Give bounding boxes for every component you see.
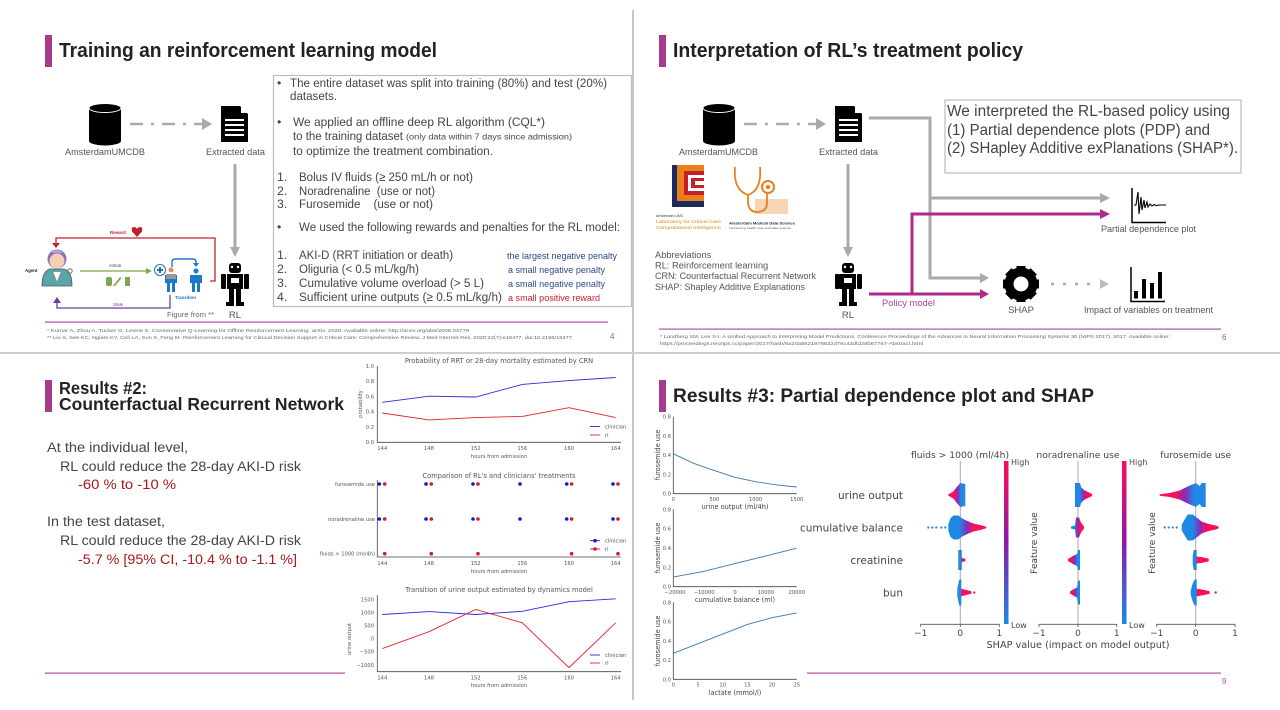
title accent bar	[45, 380, 52, 412]
divider line	[45, 322, 608, 323]
arrow: action	[80, 268, 152, 274]
text box: interpretation methods: (1) Partial dependence plots (PDP) and	[947, 122, 1210, 139]
line chart: probability of RRT or mortality: probability	[358, 390, 364, 418]
footnotes: * Kumar A, Zhou A, Tucker G, Levine S. Conservative Q-Learning for Offline Reinforcement Learning. arXiv. 2020. Available online: http://arxiv.org/abs/2006.04779	[47, 328, 469, 334]
line chart: urine output transition: 1000	[361, 611, 374, 617]
axis label: feature value furosemide: Feature value	[1148, 512, 1158, 574]
line chart: probability of RRT or mortality: clinician	[605, 424, 626, 430]
icon: treatments	[106, 277, 130, 286]
logo: amsterdam medical data science: Amsterdam Medical Data Science	[729, 220, 796, 226]
icon: partial dependence plot	[1132, 188, 1166, 222]
arrows: gray data flow	[869, 118, 1110, 283]
icon: document	[835, 106, 862, 142]
label: state: State	[113, 302, 124, 307]
line chart: urine output transition: −500	[360, 650, 374, 656]
text block: test dataset: In the test dataset,	[47, 514, 165, 529]
page number: 4	[610, 332, 615, 341]
text box: model training details: 3.	[277, 276, 287, 290]
label: extracted data: Extracted data	[819, 147, 879, 158]
title accent bar	[45, 35, 52, 67]
dot chart: RL vs clinician treatments: furosemide use	[335, 482, 375, 488]
colorbar: noradrenaline: Low	[1129, 621, 1145, 630]
arrow: state	[53, 295, 170, 308]
dot chart: RL vs clinician treatments: fluids > 1000 (ml/4h)	[320, 552, 375, 558]
heading: interpretation: Interpretation of RL’s treatment policy	[673, 40, 1024, 62]
line chart: urine output transition: 164	[611, 676, 621, 682]
SHAP plot: fluids	[911, 450, 1009, 639]
text box: model training details: •	[277, 115, 281, 129]
text box: model training details: 3.	[277, 197, 287, 211]
text box: model training details: to optimize the treatment combination.	[293, 144, 493, 158]
text box: model training details: a small negative penalty	[508, 265, 605, 275]
abbreviations text: CRN: Counterfactual Recurrent Network	[655, 271, 816, 281]
SHAP plot: furosemide: 0	[1193, 629, 1199, 639]
line chart: probability of RRT or mortality: rl	[605, 433, 609, 439]
text block: test dataset: -5.7 % [95% CI, -10.4 % to -1.1 %]	[78, 552, 297, 567]
arrow: data to RL	[230, 164, 240, 257]
text block: individual level: At the individual level,	[47, 440, 188, 455]
SHAP plot: fluids: 1	[996, 629, 1002, 639]
line chart: urine output transition: 152	[471, 676, 481, 682]
text box: model training details: The entire dataset was split into training (80%) and test (20%)	[290, 76, 607, 90]
label: extracted data: Extracted data	[206, 147, 266, 158]
line chart: PDP lactate: 25	[793, 682, 800, 688]
logo: laboratory for critical care: Laboratory for Critical Care	[656, 219, 722, 224]
line chart: PDP cumulative balance: −20000	[665, 590, 685, 596]
label: impact of variables: Impact of variables on treatment	[1084, 305, 1213, 316]
line chart: PDP urine output: 0.8	[663, 415, 671, 421]
text box: model training details: •	[277, 76, 281, 90]
SHAP plot: noradrenaline: 0	[1075, 629, 1081, 639]
SHAP plot: furosemide: furosemide use	[1160, 450, 1231, 461]
line chart: PDP cumulative balance: 0	[733, 590, 737, 596]
line chart: PDP urine output: 1500	[790, 497, 803, 503]
text box: interpretation methods: We interpreted the RL-based policy using	[947, 103, 1230, 120]
text box: model training details: 2.	[277, 184, 287, 198]
footnotes	[47, 328, 572, 341]
line chart: PDP lactate: 5	[696, 682, 700, 688]
heading: results 2	[59, 378, 344, 414]
line chart: probability of RRT or mortality: 144	[377, 446, 388, 452]
footnotes: https://proceedings.neurips.cc/paper/2017/hash/8a20a8621978632d76c43dfd28b67767-Abstract.html	[660, 341, 923, 347]
line chart: PDP cumulative balance: 0.0	[663, 585, 671, 591]
line chart: PDP cumulative balance: 0.4	[663, 546, 672, 552]
line chart: PDP urine output	[654, 415, 803, 511]
icon: bar chart	[1131, 267, 1165, 302]
line chart: urine output transition: urine output	[347, 623, 353, 655]
line chart: PDP cumulative balance: cumulative balance (ml)	[695, 596, 775, 604]
line chart: PDP urine output: 500	[709, 497, 719, 503]
text box: model training details: the largest negative penalty	[507, 251, 617, 261]
dot chart: RL vs clinician treatments: 164	[611, 561, 621, 567]
panel: results 2 counterfactual recurrent network	[45, 357, 626, 689]
line chart: urine output transition: 148	[424, 676, 434, 682]
line chart: urine output transition: hours from admission	[471, 683, 527, 689]
colorbar: fluids	[1004, 458, 1029, 630]
divider line	[659, 328, 1221, 330]
line chart: probability of RRT or mortality: 0.2	[366, 425, 374, 431]
line chart: PDP lactate: 0.4	[663, 639, 672, 645]
line chart: PDP lactate: lactate (mmol/l)	[709, 689, 761, 697]
line chart: PDP cumulative balance: 0.2	[663, 566, 671, 572]
line chart: PDP urine output: 0.0	[663, 492, 671, 498]
abbreviations text	[655, 250, 816, 292]
dot chart: RL vs clinician treatments: rl	[605, 547, 609, 553]
line chart: urine output transition: 500	[364, 624, 374, 630]
icon: plus circle	[154, 264, 166, 276]
dot chart: RL vs clinician treatments: 144	[377, 561, 388, 567]
dot chart: RL vs clinician treatments: hours from admission	[471, 569, 527, 575]
arrow: dash-dot to extracted data	[130, 118, 212, 130]
icon: heart	[132, 227, 142, 237]
label: AmsterdamUMCDB: AmsterdamUMCDB	[679, 147, 758, 158]
logo: laboratory for critical care: Computational Intelligence	[656, 225, 722, 230]
line chart: probability of RRT or mortality	[358, 357, 626, 460]
dot chart: RL vs clinician treatments: 152	[471, 561, 481, 567]
heading: results 2: Results #2:	[59, 378, 147, 398]
icon: database	[89, 104, 121, 146]
line chart: probability of RRT or mortality: 160	[564, 446, 574, 452]
label: transition: Transition	[175, 295, 196, 300]
text box: model training details: 1.	[277, 170, 287, 184]
line chart: PDP urine output: 0.6	[663, 434, 671, 440]
label: action: Action	[109, 263, 122, 268]
line chart: PDP lactate: 0.6	[663, 620, 671, 626]
line chart: urine output transition: 0	[371, 637, 374, 643]
title accent bar	[659, 35, 666, 67]
text block: test dataset: RL could reduce the 28-day AKI-D risk	[60, 533, 301, 548]
footnotes	[660, 334, 1170, 347]
line chart: PDP cumulative balance: 0.6	[663, 526, 671, 532]
arrow: transition	[172, 259, 199, 267]
line chart: PDP lactate: 20	[769, 682, 775, 688]
label: SHAP: SHAP	[1008, 305, 1034, 316]
text box: model training details: datasets.	[290, 89, 337, 103]
line chart: probability of RRT or mortality: 0.8	[366, 379, 374, 385]
divider line	[45, 672, 345, 674]
label: agent: Agent	[25, 268, 38, 273]
title accent bar	[659, 380, 666, 412]
text box: model training details: a small negative penalty	[508, 279, 605, 289]
footnotes: ** Liu S, See KC, Ngiam KY, Celi LA, Sun X, Feng M. Reinforcement Learning for Clinical Decision Support in Critical Care: Comprehensive Review. J Med Internet Res. 2020;22(7):e18477. doi:10.2196/18477	[47, 335, 572, 341]
line chart: PDP cumulative balance: −10000	[694, 590, 715, 596]
text block: test dataset	[47, 514, 301, 567]
text box: model training details: (only data within 7 days since admission)	[406, 132, 572, 142]
panel: results 3 PDP and SHAP	[654, 380, 1238, 697]
SHAP plot: furosemide: −1	[1150, 629, 1163, 639]
line chart: urine output transition: 1500	[361, 598, 374, 604]
page number: 6	[1222, 333, 1227, 342]
label: RL: RL	[229, 310, 241, 321]
label: reward: Reward	[110, 230, 126, 235]
SHAP feature labels: creatinine	[851, 555, 903, 567]
line chart: PDP cumulative balance	[654, 507, 805, 604]
label: AmsterdamUMCDB: AmsterdamUMCDB	[65, 147, 145, 158]
line chart: probability of RRT or mortality: Probability of RRT or 28-day mortality estimated by CRN	[405, 357, 593, 365]
abbreviations text: RL: Reinforcement learning	[655, 260, 768, 270]
text box: model training details: Furosemide (use or not)	[299, 197, 433, 211]
line chart: probability of RRT or mortality: 156	[517, 446, 527, 452]
line chart: PDP urine output: furosemide use	[654, 430, 662, 480]
line chart: PDP lactate: 0	[672, 682, 675, 688]
logo: amsterdam medical data science: connecting health care and data science	[729, 226, 791, 230]
heading: results 2: Counterfactual Recurrent Network	[59, 394, 344, 414]
arrow: data to RL	[843, 164, 853, 257]
text box: model training details: We used the following rewards and penalties for the RL model:	[299, 220, 620, 234]
SHAP feature labels: bun	[883, 588, 903, 600]
icon: robot	[221, 263, 249, 306]
arrows: policy model flow	[869, 209, 1110, 299]
text box: model training details: •	[277, 220, 281, 234]
line chart: probability of RRT or mortality: hours from admission	[471, 454, 527, 460]
line chart: urine output transition: Transition of urine output estimated by dynamics model	[404, 586, 593, 594]
text box: model training details: Noradrenaline (use or not)	[299, 184, 435, 198]
line chart: probability of RRT or mortality: 0.4	[366, 410, 375, 416]
icon: robot	[835, 263, 862, 306]
text box: model training details: 4.	[277, 290, 287, 304]
logo: laboratory for critical care: Amsterdam UMC	[656, 214, 684, 218]
arrow: dash-dot to extracted data	[744, 118, 826, 130]
text box: model training details: a small positive reward	[508, 293, 600, 303]
SHAP feature labels: cumulative balance	[800, 522, 903, 534]
line chart: PDP cumulative balance: furosemide use	[654, 523, 662, 573]
icon: patient before	[165, 268, 177, 292]
line chart: urine output transition: clinician	[605, 653, 626, 659]
text box: model training details: Oliguria (< 0.5 mL/kg/h)	[299, 262, 419, 276]
text block: individual level: -60 % to -10 %	[78, 477, 176, 492]
heading: results 3: Results #3: Partial dependence plot and SHAP	[673, 386, 1094, 407]
line chart: urine output transition: rl	[605, 661, 609, 667]
SHAP plot: noradrenaline: 1	[1114, 629, 1120, 639]
dot chart: RL vs clinician treatments: 148	[424, 561, 434, 567]
colorbar: noradrenaline: High	[1129, 458, 1147, 467]
colorbar: fluids: High	[1011, 458, 1029, 467]
line chart: PDP lactate: 0.8	[663, 600, 671, 606]
icon: database	[703, 104, 735, 146]
text box: model training details: Bolus IV fluids (≥ 250 mL/h or not)	[299, 170, 473, 184]
line chart: probability of RRT or mortality: 164	[611, 446, 621, 452]
line chart: probability of RRT or mortality: 0.0	[366, 440, 374, 446]
text box: model training details	[274, 76, 632, 306]
abbreviations text: SHAP: Shapley Additive Explanations	[655, 282, 805, 292]
text box: model training details: AKI-D (RRT initiation or death)	[299, 248, 453, 262]
heading: training: Training an reinforcement learning model	[59, 40, 437, 62]
footnotes: * Lundberg SM, Lee S-I. A Unified Approach to Interpreting Model Predictions. Conference Proceedings of the Advances in Neural Information Processing Systems 30 (NIPS 2017). 2017. Available online:	[660, 334, 1170, 340]
dot chart: RL vs clinician treatments: 156	[517, 561, 527, 567]
abbreviations text: Abbreviations	[655, 250, 712, 260]
colorbar: noradrenaline	[1122, 458, 1147, 630]
axis label: feature value noradrenaline: Feature value	[1030, 512, 1040, 574]
line chart: probability of RRT or mortality: 1.0	[366, 364, 374, 370]
dot chart: RL vs clinician treatments: Comparison of RL's and clinicians' treatments	[422, 472, 576, 480]
text box: model training details: 2.	[277, 262, 287, 276]
text box: model training details: Cumulative volume overload (> 5 L)	[299, 276, 484, 290]
label: RL: RL	[842, 310, 854, 321]
panel: training an RL model	[25, 35, 632, 341]
arrow: dotted to impact chart	[1051, 279, 1109, 289]
line chart: PDP urine output: 0.4	[663, 453, 672, 459]
line chart: PDP lactate: 15	[744, 682, 751, 688]
line chart: PDP urine output: 0	[672, 497, 675, 503]
SHAP plot: fluids: fluids > 1000 (ml/4h)	[911, 450, 1009, 461]
text box: model training details: 1.	[277, 248, 287, 262]
text box: model training details: We applied an offline deep RL algorithm (CQL*)	[293, 115, 545, 129]
text box: interpretation methods: (2) SHapley Additive exPlanations (SHAP*).	[947, 140, 1238, 157]
line chart: probability of RRT or mortality: 152	[471, 446, 481, 452]
icon: gear	[1003, 266, 1039, 302]
SHAP plot: fluids: −1	[914, 629, 927, 639]
line chart: PDP lactate: 0.2	[663, 658, 671, 664]
SHAP feature labels	[800, 490, 903, 600]
dot chart: RL vs clinician treatments: clinician	[605, 539, 626, 545]
icon: agent doctor	[42, 250, 72, 286]
line chart: PDP lactate: furosemide use	[654, 616, 662, 666]
SHAP plot: noradrenaline: −1	[1032, 629, 1046, 639]
logo: laboratory for critical care	[656, 165, 722, 230]
line chart: PDP lactate: 0.0	[663, 677, 671, 683]
divider line	[807, 672, 1221, 674]
logo: amsterdam medical data science	[729, 167, 796, 230]
text block: individual level	[47, 440, 301, 492]
line chart: PDP lactate: 10	[719, 682, 726, 688]
panel: interpretation of RL policy	[655, 35, 1241, 347]
line chart: urine output transition: 156	[517, 676, 527, 682]
line chart: urine output transition	[347, 586, 626, 689]
label: partial dependence plot: Partial dependence plot	[1101, 224, 1196, 235]
SHAP plot: furosemide	[1150, 450, 1238, 639]
dot chart: RL vs clinician treatments	[320, 472, 626, 575]
SHAP plot: furosemide: 1	[1232, 629, 1238, 639]
icon: document	[221, 106, 248, 142]
line chart: PDP urine output: 1000	[749, 497, 762, 503]
line chart: PDP cumulative balance: 20000	[788, 590, 805, 596]
label: policy model: Policy model	[882, 298, 935, 309]
label: figure source: Figure from **	[167, 310, 214, 319]
SHAP plot: fluids: 0	[957, 629, 963, 639]
page number: 9	[1222, 677, 1227, 686]
icon: patient after	[190, 268, 202, 292]
diagram: RL reward loop figure	[25, 227, 215, 319]
text block: individual level: RL could reduce the 28-day AKI-D risk	[60, 459, 301, 474]
line chart: PDP lactate	[654, 600, 800, 697]
axis label: SHAP value: SHAP value (impact on model output)	[986, 640, 1170, 651]
text box: model training details: Sufficient urine outputs (≥ 0.5 mL/kg/h)	[299, 290, 502, 304]
dot chart: RL vs clinician treatments: noradrenaline use	[328, 517, 375, 523]
line chart: urine output transition: 144	[377, 676, 388, 682]
line chart: urine output transition: 160	[564, 676, 574, 682]
dot chart: RL vs clinician treatments: 160	[564, 561, 574, 567]
line chart: PDP urine output: 0.2	[663, 472, 671, 478]
line chart: probability of RRT or mortality: 0.6	[366, 394, 374, 400]
line chart: PDP cumulative balance: 0.8	[663, 507, 671, 513]
text box: interpretation methods	[945, 100, 1241, 173]
SHAP feature labels: urine output	[838, 490, 903, 502]
line chart: urine output transition: −1000	[356, 663, 374, 669]
colorbar: fluids: Low	[1011, 621, 1027, 630]
line chart: PDP urine output: urine output (ml/4h)	[702, 503, 768, 511]
SHAP plot: noradrenaline: noradrenaline use	[1036, 450, 1120, 461]
line chart: probability of RRT or mortality: 148	[424, 446, 434, 452]
line chart: PDP cumulative balance: 10000	[758, 590, 774, 596]
text box: model training details: to the training dataset	[293, 129, 404, 143]
arrow: reward	[52, 238, 215, 281]
SHAP plot: noradrenaline	[1032, 450, 1120, 639]
